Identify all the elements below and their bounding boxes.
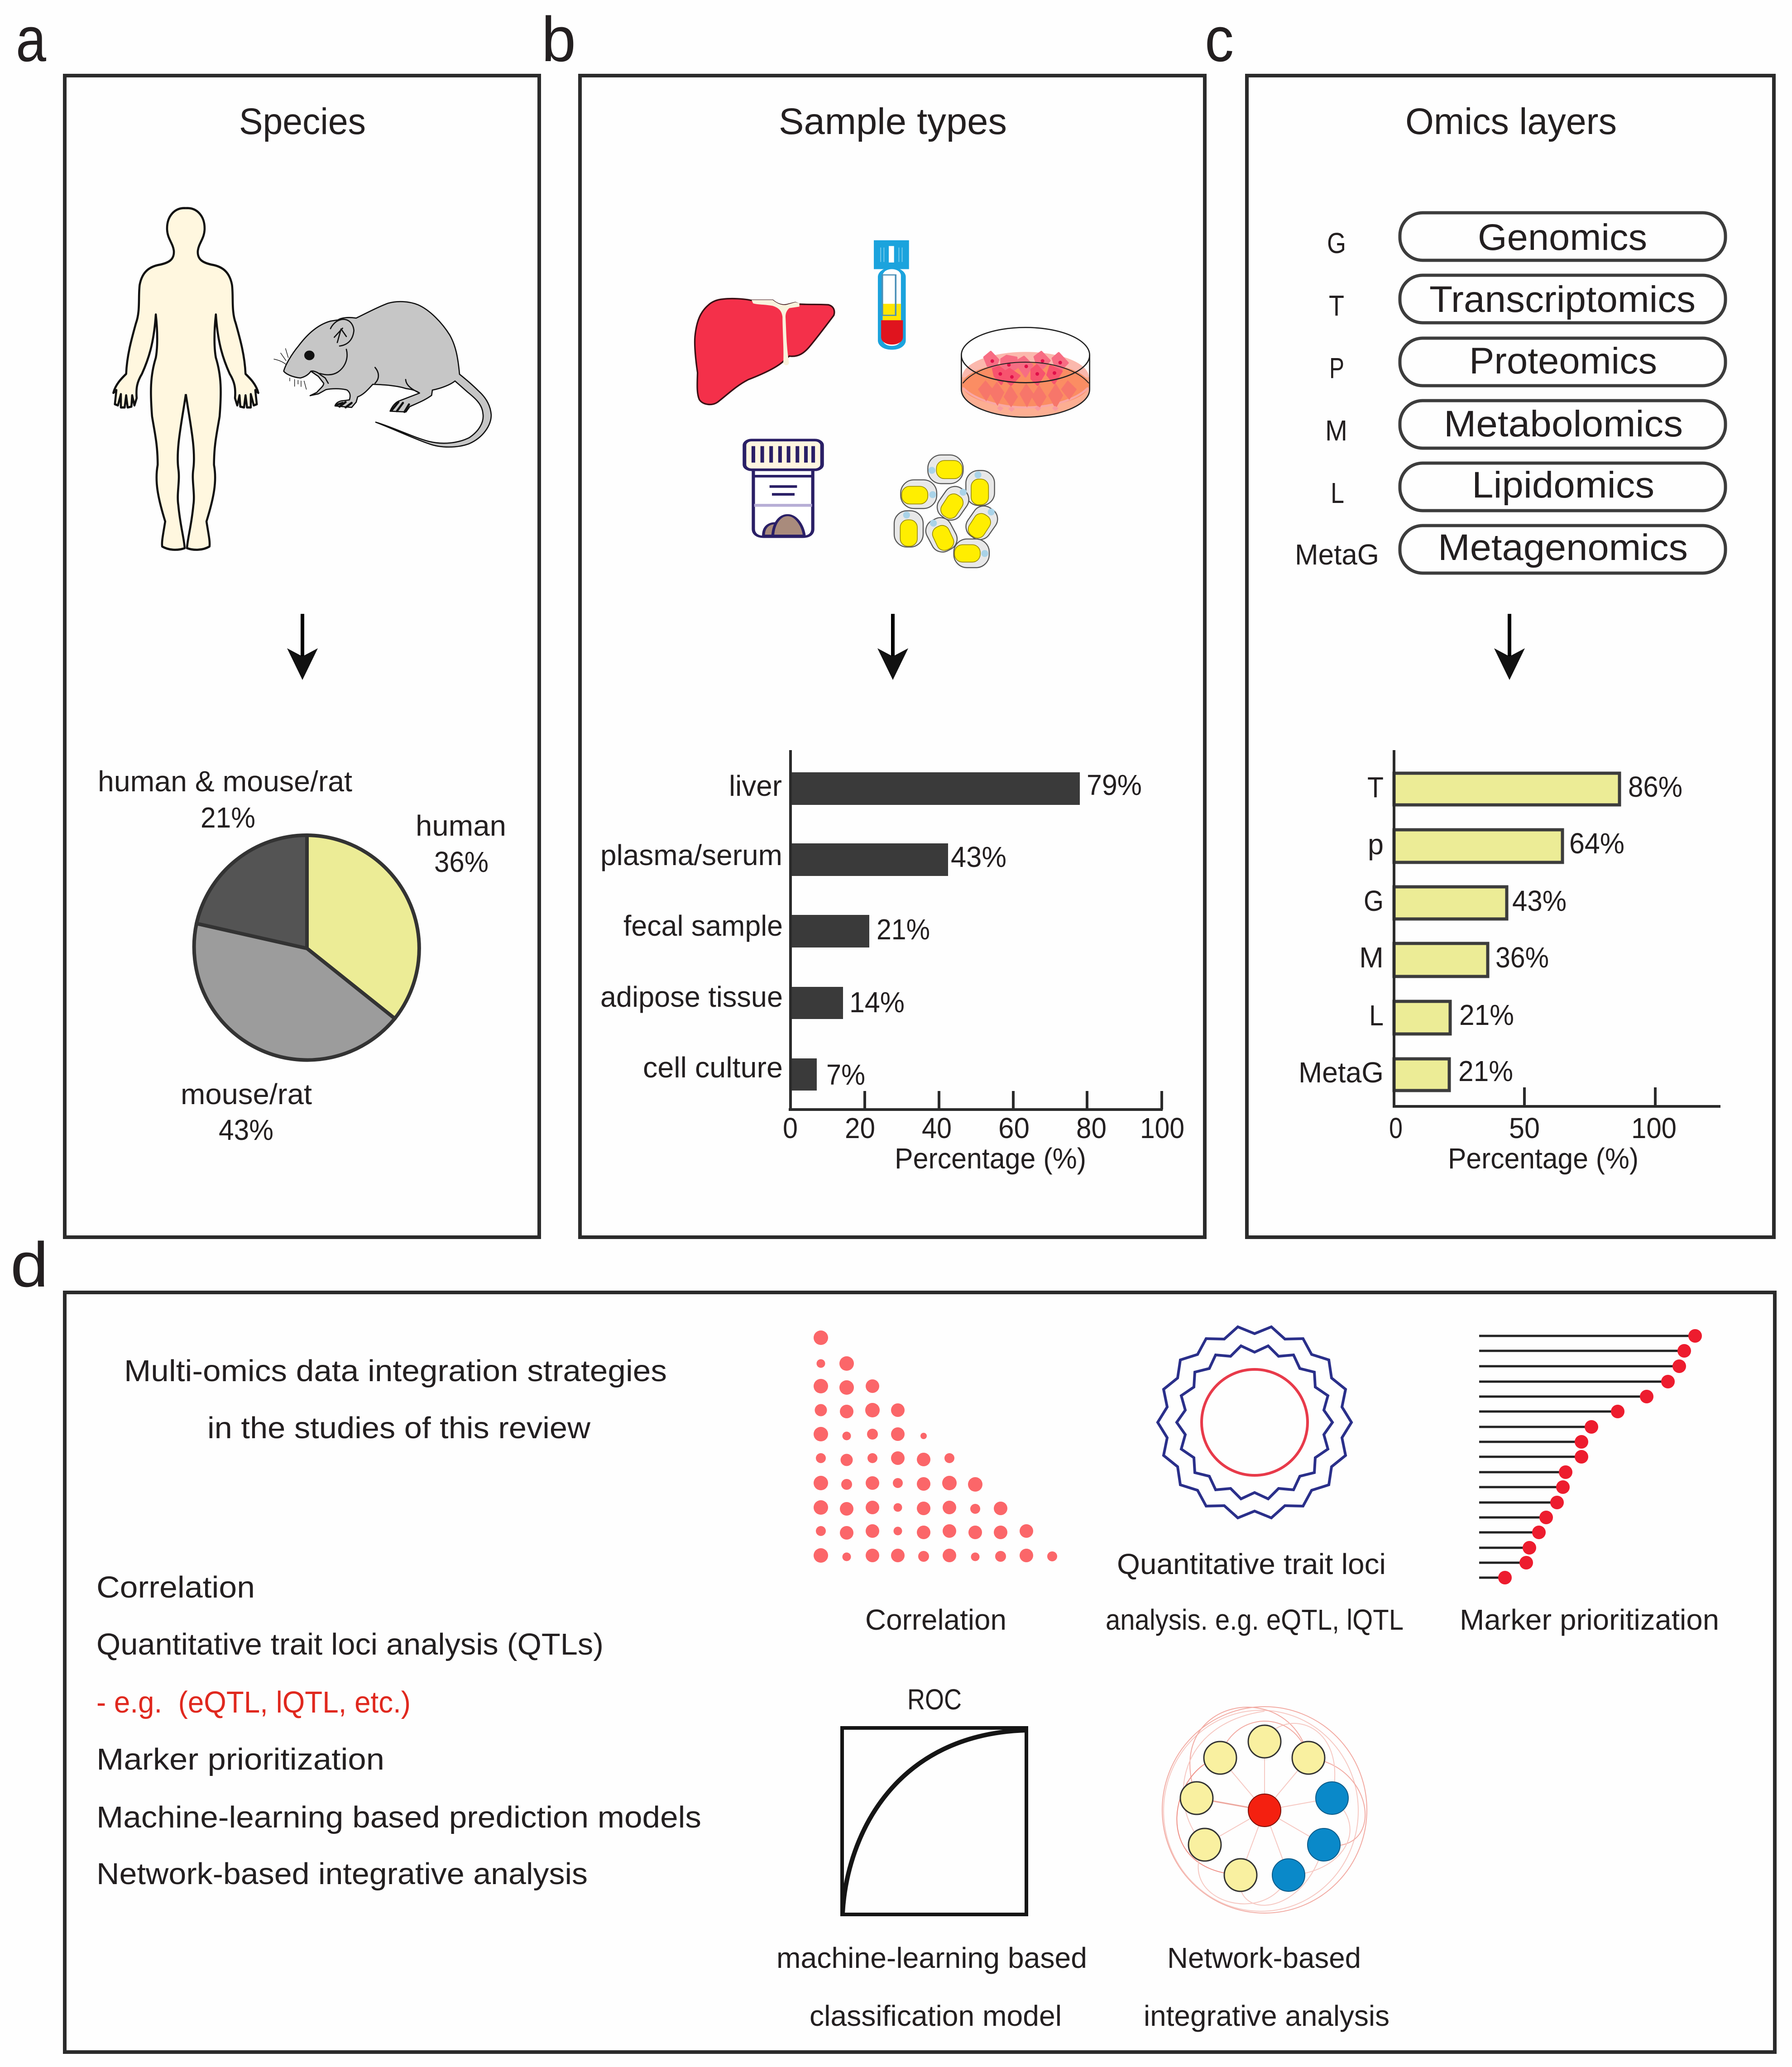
omics list: lipidomics: Lipidomics <box>1472 464 1654 506</box>
caption: QTL analysis: analysis. e.g. eQTL, lQTL <box>1106 1603 1404 1636</box>
omics list: metabolomics: Metabolomics <box>1444 403 1683 445</box>
bar: fecal sample: fecal sample <box>623 909 783 942</box>
pie chart: species share <box>194 835 419 1060</box>
omics list: proteomics: Proteomics <box>1469 340 1657 382</box>
heading: strategies <box>124 1354 667 1445</box>
caption: correlation: Correlation <box>865 1603 1006 1636</box>
strategies list <box>96 1570 701 1891</box>
strategies list: Network-based integrative analysis <box>96 1857 588 1891</box>
caption: machine-learning model <box>776 1942 1087 2032</box>
caption: network-based analysis: integrative analysis <box>1144 2000 1390 2032</box>
chart: marker prioritization lollipop <box>1479 1329 1702 1584</box>
bar: T: T <box>1367 771 1384 804</box>
omics list: genomics <box>1327 213 1725 260</box>
icon: adipose cells <box>894 455 1002 568</box>
strategies list: Quantitative trait loci analysis (QTLs) <box>96 1627 604 1661</box>
bar: cell culture: cell culture <box>643 1051 783 1084</box>
icon: blood tube <box>874 240 909 349</box>
chart: correlation dot matrix <box>814 1330 1057 1563</box>
omics list: proteomics: P <box>1329 352 1344 384</box>
pie label: human <box>416 809 506 878</box>
omics list: metabolomics: M <box>1325 414 1347 447</box>
bar: MetaG: 21% <box>1458 1055 1513 1087</box>
omics list: transcriptomics <box>1329 275 1725 323</box>
bar: G: 43% <box>1512 885 1567 917</box>
panel: omics layers <box>1247 76 1774 1237</box>
heading: omics layers: Omics layers <box>1405 101 1617 142</box>
icon: human figure <box>113 208 258 550</box>
pie label: mouse/rat: 43% <box>219 1114 273 1146</box>
strategies list: - e.g. (eQTL, lQTL, etc.) <box>96 1685 411 1719</box>
label: ROC: ROC <box>907 1683 962 1716</box>
strategies list: Correlation <box>96 1570 255 1604</box>
heading: sample types: Sample types <box>779 101 1007 142</box>
axis tick labels: 100 <box>1631 1112 1677 1144</box>
bar: T: 86% <box>1628 770 1682 803</box>
bar chart: omics layers <box>1298 750 1720 1175</box>
omics list: metagenomics: Metagenomics <box>1438 527 1688 568</box>
caption: machine-learning model: machine-learning based <box>776 1942 1087 1974</box>
bar: plasma/serum: 43% <box>951 841 1006 873</box>
panel: species <box>65 76 539 1237</box>
omics list: metagenomics <box>1295 526 1725 573</box>
omics list: genomics: Genomics <box>1478 217 1647 258</box>
bar: M <box>1359 941 1549 976</box>
chart: network diagram <box>1162 1707 1367 1913</box>
strategies list: Marker prioritization <box>96 1742 384 1776</box>
omics list: transcriptomics: Transcriptomics <box>1429 279 1696 320</box>
axis title: Percentage (%) <box>1448 1142 1639 1175</box>
caption: machine-learning model: classification model <box>810 2000 1062 2032</box>
bar: fecal sample: 21% <box>877 913 930 946</box>
strategies list: Machine-learning based prediction models <box>96 1800 701 1834</box>
icon: cell culture dish <box>961 327 1090 417</box>
axis tick labels: 50 <box>1509 1112 1540 1144</box>
arrow: species to pie <box>287 614 318 680</box>
heading: species: Species <box>239 101 366 142</box>
pie label: mouse/rat <box>181 1078 312 1146</box>
icon: fecal sample container <box>744 440 822 537</box>
panel: integration strategies <box>65 1292 1775 2052</box>
pie label: human and mouse/rat: human & mouse/rat <box>98 765 352 798</box>
omics list: metagenomics: MetaG <box>1295 538 1379 571</box>
bar: MetaG <box>1298 1055 1513 1091</box>
icon: rodent <box>274 301 491 447</box>
axis tick labels <box>1389 1112 1677 1144</box>
axis tick labels: 60 <box>998 1112 1030 1144</box>
omics list: metabolomics <box>1325 401 1725 448</box>
omics list: genomics: G <box>1327 227 1346 259</box>
bar: liver <box>729 769 1142 805</box>
bar: T <box>1367 770 1682 805</box>
axis tick labels: 100 <box>1140 1112 1184 1144</box>
slice: human 36% <box>307 835 419 1019</box>
omics list: lipidomics: L <box>1331 477 1344 509</box>
slice: human and mouse/rat 21% <box>196 835 307 948</box>
bar: cell culture <box>643 1051 865 1091</box>
heading: strategies: Multi-omics data integration strategies <box>124 1354 667 1388</box>
omics list: proteomics <box>1329 338 1725 386</box>
slice: mouse/rat 43% <box>194 923 395 1060</box>
chart: circular QTL plot <box>1158 1327 1351 1518</box>
arrow: samples to bar chart <box>877 614 908 680</box>
axis tick labels: 0 <box>783 1112 798 1144</box>
bar: cell culture: 7% <box>826 1058 865 1091</box>
panel label b: b <box>541 4 576 75</box>
omics list: transcriptomics: T <box>1329 289 1344 322</box>
bar: G: G <box>1364 885 1384 917</box>
caption: QTL analysis <box>1106 1548 1404 1636</box>
arrow: omics to bar chart <box>1494 614 1525 680</box>
caption: network-based analysis: Network-based <box>1167 1942 1361 1974</box>
omics list: lipidomics <box>1331 463 1725 511</box>
pie label: human and mouse/rat <box>98 765 352 834</box>
axes and ticks <box>789 750 1163 1110</box>
pie label: human: 36% <box>434 846 489 878</box>
bar: adipose tissue <box>600 981 905 1019</box>
bar: MetaG: MetaG <box>1298 1056 1384 1089</box>
panel: sample types <box>580 76 1205 1237</box>
pie label: human and mouse/rat: 21% <box>201 801 255 834</box>
axis tick labels <box>783 1112 1184 1144</box>
axis tick labels: 20 <box>845 1112 875 1144</box>
bar: M: 36% <box>1495 941 1549 974</box>
bar chart: sample types <box>600 750 1184 1175</box>
axis tick labels: 0 <box>1389 1112 1403 1144</box>
panel label a: a <box>16 4 46 75</box>
chart: ROC curve <box>842 1728 1027 1914</box>
pie label: human: human <box>416 809 506 842</box>
axis title: Percentage (%) <box>895 1142 1086 1175</box>
bar: L <box>1369 999 1514 1034</box>
caption: marker prioritization: Marker prioritization <box>1460 1603 1719 1636</box>
bar: adipose tissue: 14% <box>849 986 905 1019</box>
caption: network-based analysis <box>1144 1942 1390 2032</box>
heading: strategies: in the studies of this review <box>207 1411 591 1445</box>
axes and ticks <box>1393 750 1720 1108</box>
bar: adipose tissue: adipose tissue <box>600 981 783 1013</box>
panel label d: d <box>10 1229 48 1300</box>
bar: plasma/serum <box>600 839 1006 876</box>
bar: L: 21% <box>1459 999 1514 1031</box>
bar: L: L <box>1369 999 1384 1032</box>
bar: liver: liver <box>729 770 782 802</box>
caption: QTL analysis: Quantitative trait loci <box>1117 1548 1386 1580</box>
bar: M: M <box>1359 941 1384 974</box>
bar: fecal sample <box>623 909 930 947</box>
bar: p: p <box>1368 828 1384 861</box>
icon: liver <box>695 299 834 405</box>
bar: p <box>1368 827 1624 862</box>
panel label c: c <box>1205 4 1234 75</box>
axis tick labels: 40 <box>922 1112 952 1144</box>
pie label: mouse/rat: mouse/rat <box>181 1078 312 1110</box>
axis tick labels: 80 <box>1076 1112 1107 1144</box>
bar: plasma/serum: plasma/serum <box>600 839 782 871</box>
bar: liver: 79% <box>1087 769 1142 801</box>
bar: G <box>1364 885 1567 919</box>
bar: p: 64% <box>1569 827 1624 860</box>
